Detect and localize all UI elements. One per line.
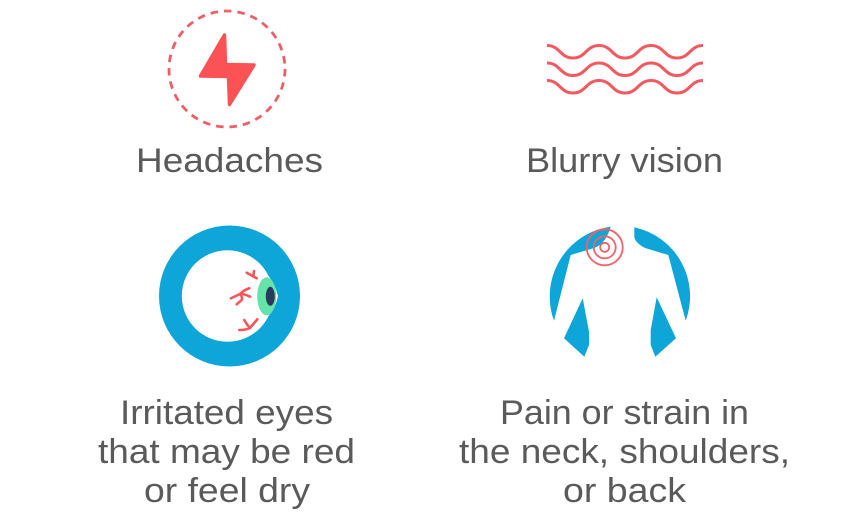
label: pain or strain: [459, 394, 790, 510]
icon: lightning bolt in dashed circle: [169, 11, 285, 127]
panel: blurry vision: [526, 46, 723, 180]
panel: pain or strain: [459, 227, 790, 510]
label: pain or strain: Pain or strain in: [500, 394, 749, 432]
panel: headaches: [136, 11, 323, 180]
label: irritated eyes: Irritated eyes: [120, 394, 333, 432]
label: pain or strain: the neck, shoulders,: [459, 433, 790, 471]
label: irritated eyes: [98, 394, 355, 510]
label: irritated eyes: or feel dry: [144, 472, 310, 510]
icon: upper body silhouette: [550, 227, 690, 357]
icon: irritated eye: [159, 226, 300, 366]
panel: irritated eyes: [98, 226, 355, 510]
label: irritated eyes: that may be red: [98, 433, 355, 471]
label: pain or strain: or back: [563, 472, 687, 510]
icon: pain target rings: [587, 229, 623, 265]
label: blurry vision: Blurry vision: [526, 142, 723, 180]
icon: wavy lines: [547, 46, 703, 93]
label: headaches: Headaches: [136, 142, 323, 180]
